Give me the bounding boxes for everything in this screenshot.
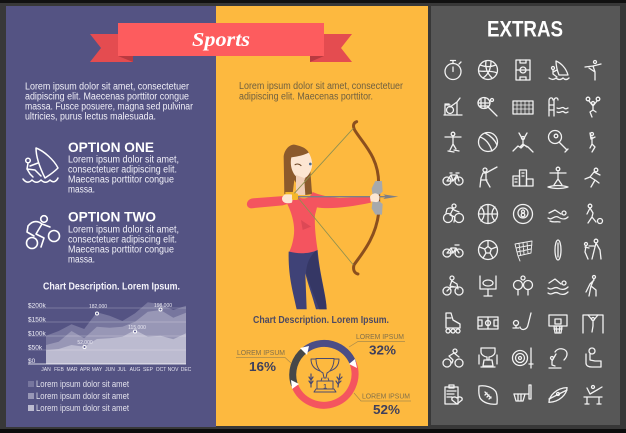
- icon: pommel gymnast: [584, 386, 602, 404]
- callout: 16%: 16%: [249, 359, 276, 374]
- chart legend: Lorem ipsum dolor sit amet: [36, 403, 129, 413]
- icon: racket: [478, 98, 497, 116]
- icon: cheerleader: [586, 97, 600, 117]
- option one text: massa.: [68, 185, 95, 196]
- option two text: OPTION TWO: [68, 209, 156, 225]
- icon: volleyball: [478, 60, 498, 80]
- chart y axis labels: $100k: [28, 330, 46, 338]
- icon: target: [512, 348, 533, 368]
- chart data labels: 182,000: [89, 304, 107, 310]
- donut chart: [291, 343, 357, 405]
- icon: basketball hoop: [549, 315, 567, 333]
- option two text: [68, 209, 179, 266]
- icon: footballer: [587, 204, 602, 224]
- chart y axis labels: [28, 302, 46, 365]
- icon: medical clipboard: [445, 385, 462, 404]
- icon: field: [478, 317, 498, 329]
- icon: golfer: [586, 276, 596, 296]
- title text: Sports: [192, 29, 250, 51]
- option one text: consectetuer adipiscing elit.: [68, 165, 177, 176]
- centre chart title: Chart Description. Lorem Ipsum.: [253, 315, 389, 326]
- icon: surfer: [548, 167, 568, 188]
- icon: american football: [479, 386, 497, 404]
- donut segment 52%: [294, 363, 355, 405]
- icon: skater: [445, 132, 461, 152]
- icon: basketball: [478, 204, 498, 224]
- chart month labels: OCT: [156, 367, 166, 373]
- intro text block: Lorem ipsum dolor sit amet, consectetuer: [25, 82, 190, 92]
- intro text block: massa. Fusce posuere, magna sed pulvinar: [25, 102, 194, 113]
- chart data labels: [77, 303, 172, 346]
- icon: cyclist: [26, 216, 60, 248]
- chart month labels: FEB: [54, 367, 65, 373]
- callout: 52%: [354, 392, 411, 417]
- chart month labels: JUN: [105, 367, 115, 373]
- chart data labels: 115,000: [128, 325, 146, 331]
- chart legend: [28, 379, 129, 413]
- centre intro text: adipiscing elit. Maecenas porttitor.: [239, 92, 373, 102]
- callout: 52%: LOREM IPSUM: [362, 392, 410, 400]
- intro text block: [25, 82, 194, 123]
- icon: ping pong: [514, 276, 532, 295]
- chart title: Chart Description. Lorem Ipsum.: [43, 282, 180, 293]
- icon: rollerblade: [446, 313, 460, 333]
- icon: fencer: [480, 167, 497, 187]
- icon: kite surfer: [549, 349, 567, 368]
- icon: checkered flag: [515, 241, 532, 261]
- icon: exercise bike: [444, 98, 462, 115]
- chart month labels: MAY: [92, 367, 103, 373]
- icon grid: [443, 60, 603, 407]
- centre intro text: [239, 81, 404, 102]
- option one text: [68, 139, 179, 196]
- chart month labels: AUG: [130, 367, 141, 373]
- option one text: Maecenas porttitor congue: [68, 175, 174, 186]
- title ribbon: [90, 23, 352, 62]
- icon: climber: [513, 133, 533, 152]
- icon: runner: [590, 132, 595, 152]
- option one text: Lorem ipsum dolor sit amet,: [68, 155, 179, 166]
- option two text: Lorem ipsum dolor sit amet,: [68, 225, 179, 236]
- area chart: [28, 302, 192, 373]
- chart month labels: MAR: [66, 367, 78, 373]
- icon: sprinter: [585, 168, 600, 187]
- icon: swimmer: [548, 210, 568, 222]
- icon: stopwatch: [445, 60, 461, 80]
- option two text: consectetuer adipiscing elit.: [68, 235, 177, 246]
- icon: windsurfer: [23, 148, 58, 182]
- illustration: archer woman: [247, 122, 398, 309]
- chart data labels: 198,000: [154, 303, 172, 309]
- icon: tennis ball: [478, 132, 498, 152]
- icon: trophy: 1: [323, 384, 327, 390]
- icon: swimmer: [548, 279, 568, 294]
- callout: 16%: LOREM IPSUM: [237, 348, 285, 357]
- donut segment 32%: [305, 343, 353, 363]
- icon: strong arm: [586, 348, 601, 367]
- icon: soccer ball: [478, 240, 498, 260]
- chart legend: Lorem ipsum dolor sit amet: [36, 391, 129, 401]
- intro text block: ultricies, purus lectus malesuada.: [25, 112, 156, 123]
- callout: 16%: [236, 348, 291, 374]
- chart month labels: NOV: [168, 367, 179, 373]
- icon: kayak: [548, 383, 568, 407]
- chart month labels: APR: [80, 367, 91, 373]
- callout: 32%: 32%: [369, 342, 396, 358]
- centre intro text: Lorem ipsum dolor sit amet, consectetuer: [239, 81, 404, 92]
- panel: centre yellow: [216, 6, 428, 426]
- icon: goal net: [513, 101, 533, 114]
- chart y axis labels: $200k: [28, 302, 46, 310]
- icon: football goal: [480, 276, 496, 296]
- option one text: OPTION ONE: [68, 139, 154, 155]
- chart data labels: 52,000: [77, 340, 93, 346]
- chart legend: Lorem ipsum dolor sit amet: [36, 379, 129, 389]
- icon: cyclist: [444, 204, 464, 222]
- icon: road cyclist: [443, 349, 463, 367]
- callout: 32%: [349, 332, 405, 358]
- panel: left purple: [6, 6, 216, 427]
- icon: billiard ball: [514, 204, 532, 224]
- icon: bike: [443, 245, 463, 257]
- chart month labels: [41, 367, 192, 373]
- chart month labels: SEP: [143, 367, 154, 373]
- icon: soccer field: [516, 60, 530, 80]
- icon: gymnast: [585, 60, 601, 80]
- chart month labels: DEC: [181, 367, 192, 373]
- extras heading: EXTRAS: [487, 16, 563, 42]
- icon: tennis racket: [548, 130, 568, 152]
- icon: trophy: [309, 358, 342, 392]
- icon: golf club: [513, 313, 531, 329]
- panel: extras dark: [431, 6, 620, 425]
- icon: hoop side: [514, 385, 531, 401]
- icon: motorbike: [443, 276, 463, 295]
- icon: podium: [513, 170, 533, 186]
- chart y axis labels: $50k: [28, 344, 43, 352]
- icon: trophy: [479, 348, 497, 367]
- option two text: Maecenas porttitor congue: [68, 245, 174, 256]
- chart y axis labels: $150k: [28, 316, 46, 324]
- chart y axis labels: $0: [28, 358, 36, 365]
- icon: pool ladder: [549, 98, 568, 116]
- chart month labels: JUL: [118, 367, 127, 373]
- callout: 52%: 52%: [373, 402, 400, 417]
- option two text: massa.: [68, 255, 95, 266]
- chart month labels: JAN: [41, 367, 51, 373]
- icon: parallel bars gymnast: [583, 315, 603, 333]
- icon: bicycle: [443, 173, 463, 185]
- icon: karate: [584, 239, 601, 259]
- icon: windsurfer: [549, 61, 569, 80]
- icon: surfboard: [555, 240, 561, 260]
- intro text block: adipiscing elit. Maecenas porttitor congue: [25, 92, 189, 103]
- donut segment 16%: [293, 350, 305, 385]
- callout: 32%: LOREM IPSUM: [356, 332, 404, 341]
